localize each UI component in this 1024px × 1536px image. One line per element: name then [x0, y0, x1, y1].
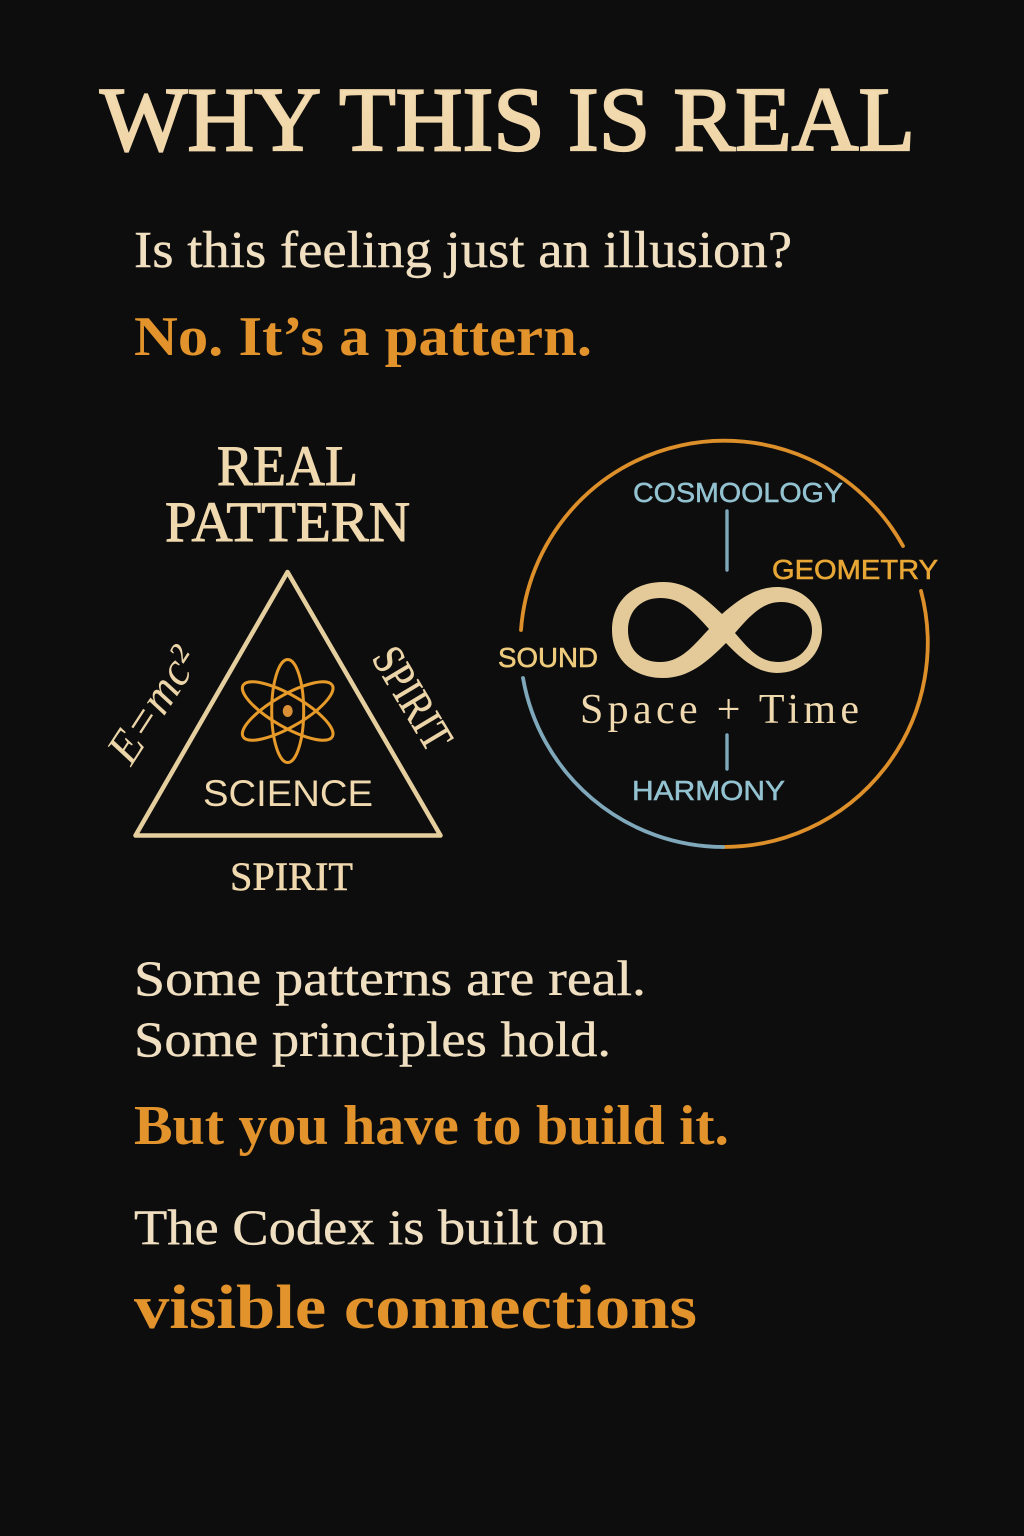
connector: top	[725, 511, 729, 570]
label: spirit right side: SPIRIT	[362, 637, 463, 759]
ring: orange upper arc	[521, 441, 903, 630]
label: sound: SOUND	[498, 642, 598, 673]
diagram: real pattern triangle	[96, 435, 463, 899]
label: science: SCIENCE	[203, 773, 373, 814]
icon: atom	[235, 660, 340, 762]
ring: blue arc	[523, 678, 723, 847]
label: geometry: GEOMETRY	[772, 554, 938, 585]
label: space + time: Space + Time	[580, 687, 859, 733]
diagram: infinity circle	[498, 441, 938, 847]
highlight: build it: But you have to build it.	[134, 1095, 729, 1157]
text block: patterns are real: Some patterns are real.	[134, 950, 646, 1006]
text block: codex: The Codex is built on	[134, 1199, 606, 1255]
label: equation: E=mc²	[96, 637, 210, 774]
ring: orange right arc	[723, 591, 928, 847]
label: cosmoology: COSMOOLOGY	[633, 477, 843, 508]
highlight: visible connections: visible connections	[134, 1274, 697, 1342]
heading: real pattern: PATTERN	[165, 491, 410, 554]
heading: real pattern: REAL	[217, 435, 358, 498]
heading: real pattern	[165, 435, 410, 554]
answer highlight: No. It’s a pattern.	[134, 306, 592, 368]
icon: infinity symbol	[612, 582, 822, 678]
connector: bottom	[725, 735, 729, 769]
title: WHY THIS IS REAL	[100, 69, 915, 170]
label: harmony: HARMONY	[632, 775, 785, 806]
question text: Is this feeling just an illusion?	[134, 222, 792, 279]
text block: patterns are real: Some principles hold.	[134, 1011, 611, 1067]
text block: patterns are real	[134, 950, 646, 1067]
label: spirit bottom: SPIRIT	[230, 854, 353, 899]
triangle outline	[136, 572, 440, 836]
